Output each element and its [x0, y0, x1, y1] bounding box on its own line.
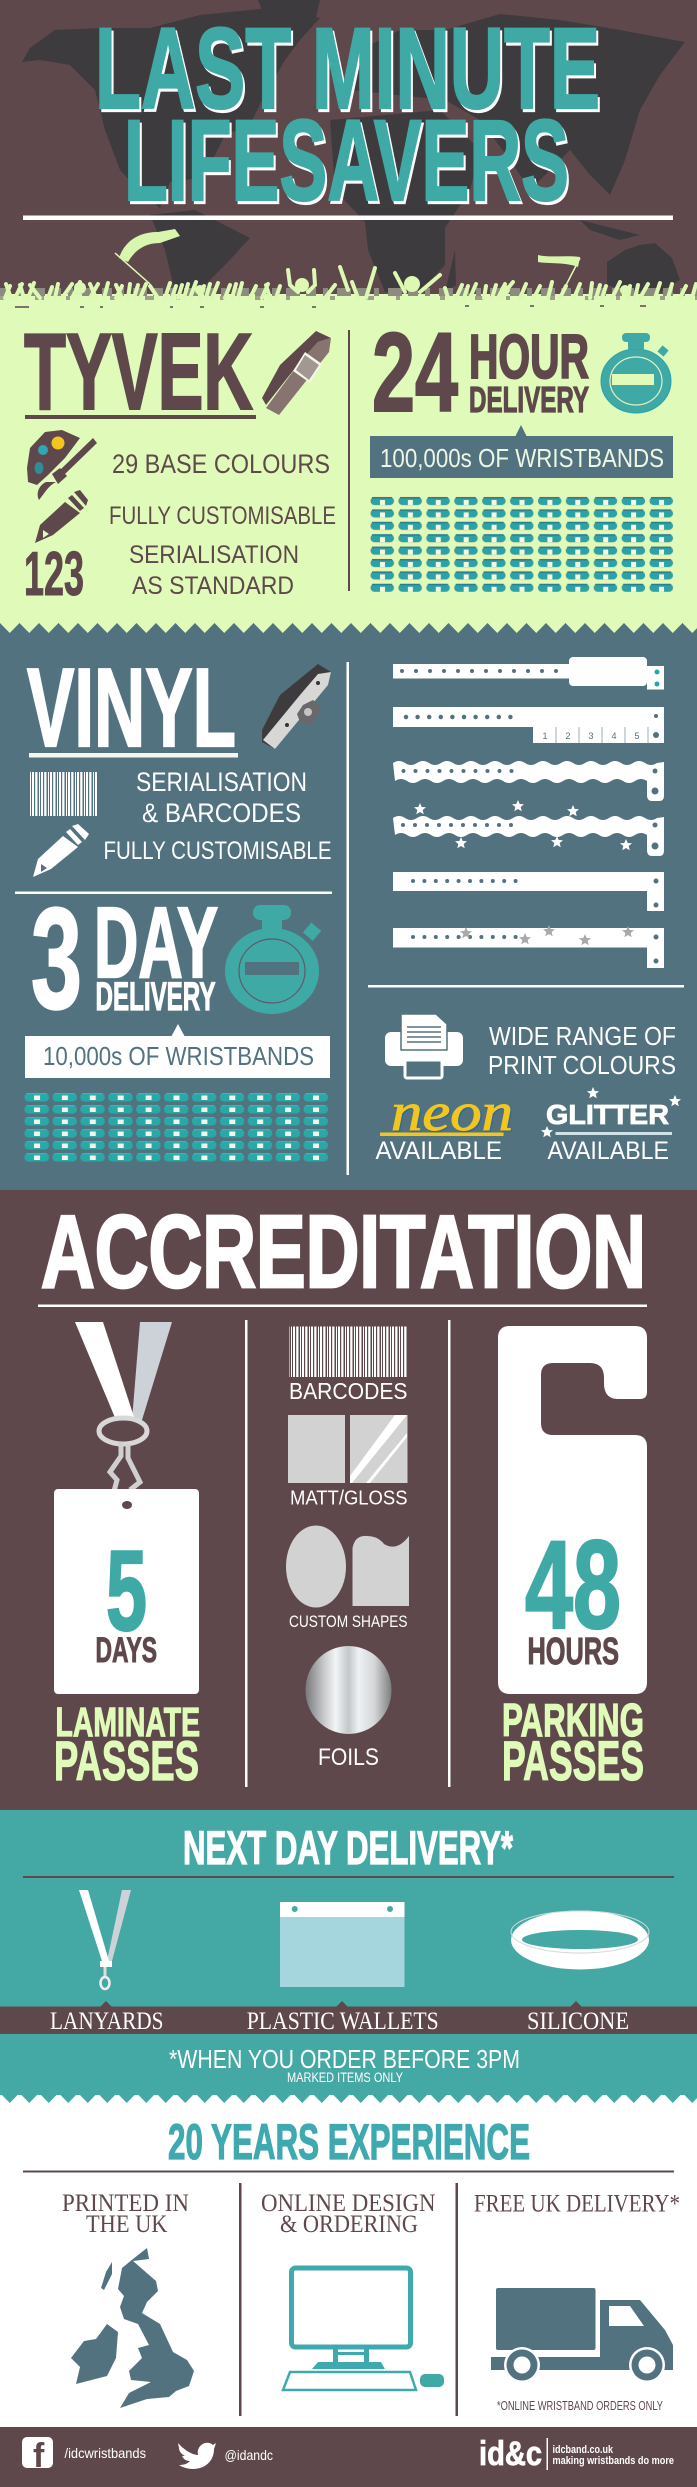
tyvek text: serialisation: SERIALISATION: [129, 541, 299, 569]
icon: custom shapes: [286, 1526, 409, 1608]
heading: 3 day delivery: DELIVERY: [96, 975, 216, 1019]
glitter available: [541, 1087, 681, 1165]
world map: [22, 0, 685, 292]
panel: next day delivery background: [0, 1810, 697, 2095]
parking hanger card: [498, 1326, 647, 1694]
icon: computer: [283, 2268, 444, 2390]
logo: id&c: id&c: [479, 2435, 542, 2473]
column heading: printed in the uk: PRINTED IN: [62, 2190, 189, 2217]
heading: vinyl: [27, 646, 238, 770]
wristband: wavy: [393, 761, 664, 801]
title: [95, 5, 602, 228]
wristband: numbered tabs: 3: [588, 731, 594, 741]
icon: barcode large: [289, 1326, 408, 1377]
glitter available: GLITTER: [546, 1099, 669, 1130]
icon: palette and brush: [27, 430, 97, 500]
panel: vinyl section background: [0, 623, 697, 1190]
callout: 10,000s of wristbands: [25, 1024, 330, 1078]
product labels strip: LANYARDS: [50, 2008, 164, 2035]
column heading: online design and ordering: [261, 2190, 436, 2238]
icon: facebook: f: [33, 2437, 45, 2475]
heading: 24 hour delivery: [372, 310, 589, 435]
icon: twitter: [178, 2443, 216, 2469]
icon: delivery truck: [491, 2288, 673, 2383]
wristband: numbered tabs: 5: [634, 731, 640, 741]
neon available: neon: [392, 1083, 514, 1143]
icon: teal stopwatch: [225, 905, 321, 1014]
heading: next day delivery: NEXT DAY DELIVERY*: [183, 1821, 513, 1874]
heading: 3 day delivery: 3: [31, 878, 82, 1039]
product labels strip: SILICONE: [527, 2008, 629, 2035]
wristband: numbered tabs: [393, 707, 664, 743]
heading: laminate passes: LAMINATE: [56, 1699, 200, 1745]
heading: vinyl: VINYL: [27, 646, 236, 770]
vinyl text: serialisation and barcodes: [136, 767, 307, 828]
laminate pass card: 5: [106, 1528, 147, 1655]
note: when you order before 3pm: [169, 2044, 520, 2085]
icon: lanyard: [75, 1322, 172, 1502]
tyvek text: fully customisable: FULLY CUSTOMISABLE: [109, 502, 336, 530]
heading: 3 day delivery: [31, 878, 218, 1039]
icon: printer: [385, 1014, 463, 1078]
print colours text: PRINT COLOURS: [488, 1050, 676, 1080]
wristband: numbered tabs: 1: [542, 731, 548, 741]
callout: 100,000s of wristbands: [370, 425, 673, 478]
icon: small lanyard: [79, 1890, 131, 1989]
column heading: printed in the uk: THE UK: [86, 2211, 168, 2238]
twitter handle: @idandc: [224, 2447, 273, 2463]
icon: silicone band: [511, 1910, 649, 1970]
heading: laminate passes: [54, 1699, 200, 1792]
tyvek text: 29 base colours: 29 BASE COLOURS: [112, 449, 330, 479]
heading: tyvek: [24, 311, 256, 433]
icon: vinyl wristband: [262, 664, 331, 749]
wristband: plain with glitter: [393, 925, 664, 968]
wristband: hospital style: [393, 657, 664, 690]
neon available: [376, 1082, 514, 1165]
icon: 123: 123: [24, 540, 84, 609]
product labels strip: PLASTIC WALLETS: [247, 2008, 439, 2035]
panel: footer: [0, 2427, 697, 2487]
chart: wristband pictogram 10,000s: [24, 1092, 328, 1164]
wristband: plain: [393, 872, 664, 911]
column heading: printed in the uk: [62, 2190, 189, 2238]
wristband: wavy with stars: [393, 800, 664, 856]
panel: header background: [0, 0, 697, 305]
heading: laminate passes: PASSES: [54, 1729, 199, 1792]
tyvek text: serialisation: [129, 541, 299, 600]
heading: parking passes: [502, 1694, 644, 1792]
icon: matt and gloss squares: [288, 1415, 408, 1483]
heading: 24 hour delivery: 24: [372, 310, 458, 435]
wristband: numbered tabs: 2: [565, 731, 571, 741]
neon available: neon: [391, 1082, 513, 1142]
logo: id&c: [479, 2435, 674, 2473]
panel: tyvek section background: [0, 294, 697, 623]
icon: barcode: [29, 772, 97, 816]
logo: id&c: making wristbands do more: [552, 2455, 674, 2467]
heading: 24 hour delivery: DELIVERY: [469, 379, 589, 420]
heading: tyvek: TYVEK: [24, 311, 253, 433]
icon: facebook: [22, 2437, 53, 2475]
facebook handle: /idcwristbands: [64, 2445, 146, 2461]
laminate pass card: DAYS: [96, 1631, 157, 1670]
icon: foil circle: [306, 1646, 392, 1734]
neon available: AVAILABLE: [376, 1137, 502, 1165]
product labels strip: [0, 2001, 697, 2035]
print colours text: WIDE RANGE OF: [489, 1021, 676, 1051]
tyvek text: serialisation: AS STANDARD: [132, 572, 294, 600]
crowd silhouette: [0, 267, 697, 307]
heading: 24 hour delivery: HOUR: [469, 323, 589, 392]
parking hanger card: HOURS: [528, 1631, 619, 1673]
label: matt/gloss: MATT/GLOSS: [290, 1488, 408, 1510]
icon: white pencil: [33, 824, 89, 877]
panel: experience background: [0, 2095, 697, 2427]
panel: accreditation background: [0, 1190, 697, 1810]
label: barcodes: BARCODES: [289, 1378, 408, 1404]
icon: plastic wallet: [280, 1902, 404, 1987]
note: when you order before 3pm: *WHEN YOU ORDER BEFORE 3PM: [169, 2044, 520, 2074]
heading: 3 day delivery: DAY: [94, 887, 218, 999]
print colours text: [488, 1021, 676, 1080]
icon: stopwatch: [601, 333, 671, 413]
column heading: online design and ordering: & ORDERING: [280, 2211, 418, 2238]
laminate pass card: [54, 1489, 199, 1694]
logo: id&c: idcband.co.uk: [552, 2444, 614, 2456]
icon: tyvek wristband: [262, 331, 331, 415]
label: custom shapes: CUSTOM SHAPES: [289, 1612, 408, 1631]
chart: wristband pictogram 100,000s: [370, 496, 674, 592]
parking hanger card: 48: [525, 1516, 621, 1655]
column heading: online design and ordering: ONLINE DESIGN: [261, 2190, 436, 2217]
glitter available: AVAILABLE: [548, 1137, 669, 1165]
icon: uk and ireland map: [71, 2248, 194, 2408]
icon: pencil: [35, 490, 88, 543]
vinyl text: serialisation and barcodes: & BARCODES: [142, 798, 301, 828]
vinyl text: fully customisable: FULLY CUSTOMISABLE: [104, 837, 332, 865]
icon: flags: [115, 229, 580, 293]
wristband: numbered tabs: 4: [611, 731, 617, 741]
label: foils: FOILS: [318, 1744, 379, 1771]
callout: 10,000s of wristbands: 10,000s OF WRISTBANDS: [43, 1041, 314, 1071]
note: when you order before 3pm: MARKED ITEMS ONLY: [287, 2070, 403, 2085]
vinyl text: serialisation and barcodes: SERIALISATION: [136, 767, 307, 797]
